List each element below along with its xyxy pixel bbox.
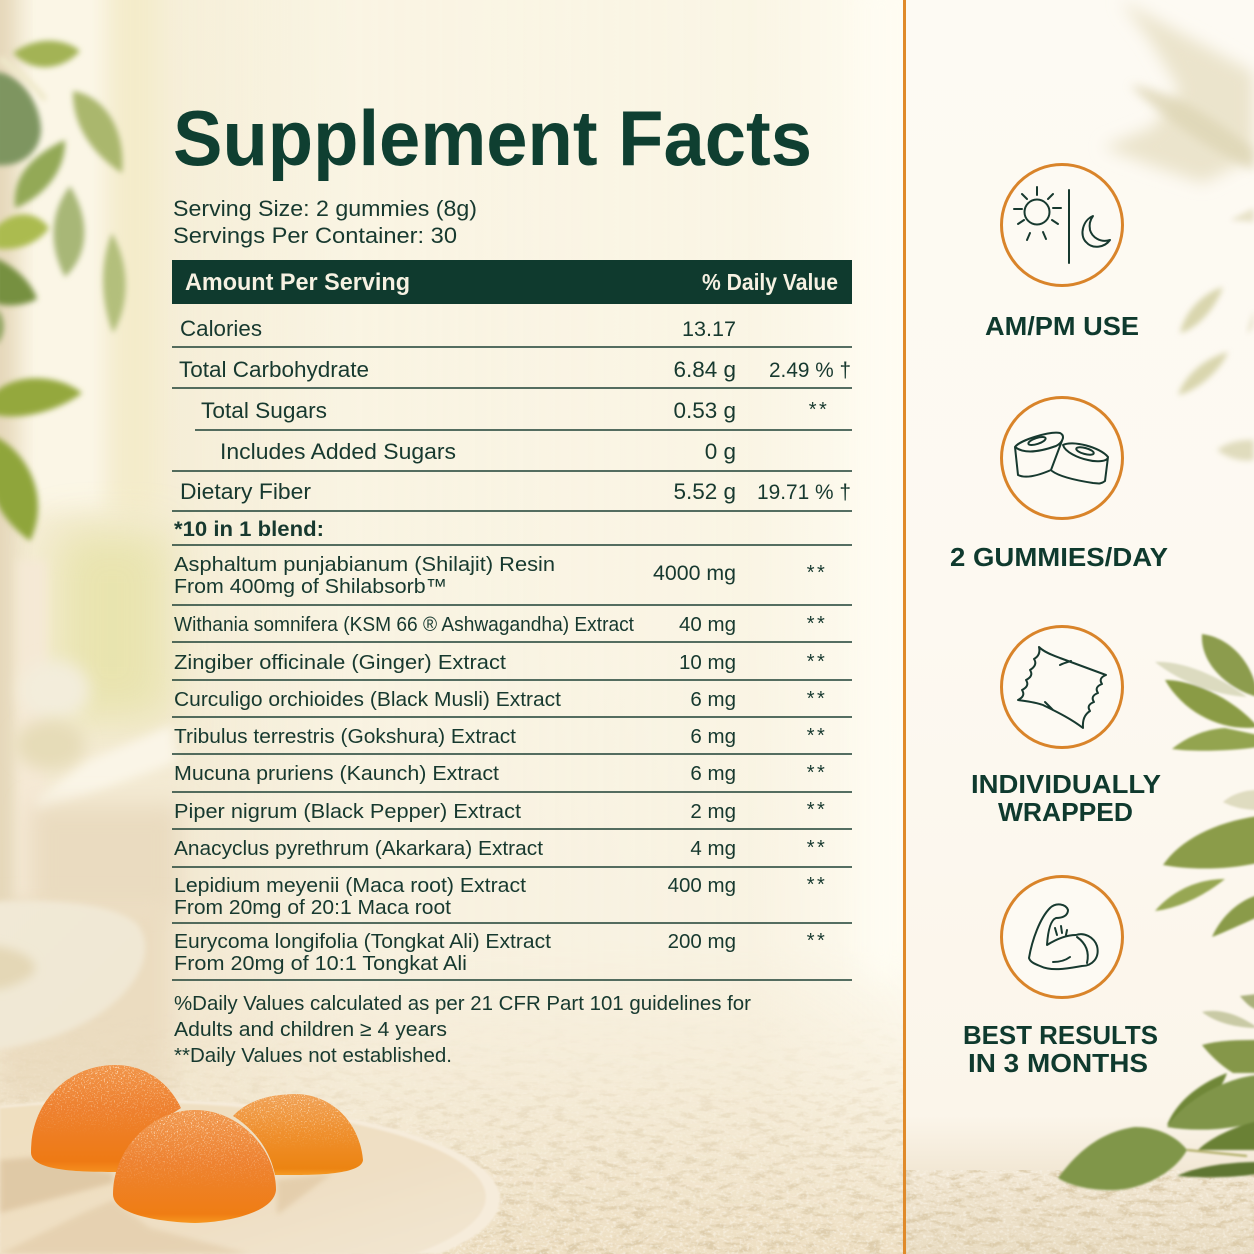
benefit: AM/PM use bbox=[985, 164, 1139, 341]
row: shilajit bbox=[172, 553, 852, 605]
row: total carbohydrate: 2.49 % † bbox=[769, 358, 851, 382]
row: akarkara bbox=[172, 837, 852, 867]
gummy centre bbox=[110, 1105, 280, 1223]
row: dietary fiber bbox=[172, 479, 852, 511]
row: dietary fiber: Dietary Fiber bbox=[180, 479, 312, 504]
benefit: best results bbox=[963, 876, 1158, 1078]
row: ashwagandha: 40 mg bbox=[679, 613, 736, 636]
label: 2 GUMMIES/DAY bbox=[950, 542, 1168, 572]
gummy candies bbox=[20, 1060, 370, 1223]
row: gokshura: Tribulus terrestris (Gokshura) Extract bbox=[174, 725, 516, 748]
row: total sugars: 0.53 g bbox=[673, 398, 736, 423]
row: black musli: 6 mg bbox=[690, 688, 736, 711]
background photo: left side bbox=[0, 0, 905, 1254]
row: total sugars: ** bbox=[809, 399, 829, 421]
row: dietary fiber: 5.52 g bbox=[673, 479, 736, 504]
row: maca: ** bbox=[807, 874, 827, 896]
gummy right bbox=[233, 1094, 363, 1175]
row: calories: Calories bbox=[180, 316, 262, 341]
label: BEST RESULTS bbox=[963, 1020, 1158, 1050]
row: maca bbox=[172, 874, 852, 923]
table header bar bbox=[172, 260, 852, 304]
row: dietary fiber: 19.71 % † bbox=[757, 480, 851, 504]
table header bar: Amount Per Serving bbox=[185, 269, 410, 296]
footnotes: %Daily Values calculated as per 21 CFR Part 101 guidelines for bbox=[174, 992, 751, 1015]
row: kaunch: 6 mg bbox=[690, 762, 736, 785]
row: total carbohydrate: 6.84 g bbox=[673, 357, 736, 382]
row: total carbohydrate: Total Carbohydrate bbox=[179, 357, 369, 382]
footnotes: Adults and children ≥ 4 years bbox=[174, 1018, 447, 1041]
serving info: Servings Per Container: 30 bbox=[173, 223, 457, 248]
row: tongkat ali: 200 mg bbox=[668, 930, 736, 953]
label bbox=[963, 1020, 1158, 1078]
row: shilajit: 4000 mg bbox=[653, 562, 736, 585]
row: shilajit: Asphaltum punjabianum (Shilajit) Resin bbox=[174, 553, 555, 576]
row: shilajit: From 400mg of Shilabsorb™ bbox=[174, 575, 447, 598]
gummy left bbox=[31, 1065, 181, 1172]
benefit: 2 gummies per day bbox=[950, 398, 1168, 572]
row: ginger bbox=[172, 651, 852, 680]
row: black pepper: 2 mg bbox=[690, 800, 736, 823]
icon: two gummies bbox=[1002, 398, 1122, 518]
row: calories bbox=[172, 316, 852, 347]
vertical orange divider bbox=[903, 0, 906, 1254]
row: ginger: ** bbox=[807, 651, 827, 673]
serving info bbox=[173, 196, 477, 248]
right foliage: faint top leaves bbox=[1103, 0, 1254, 461]
row: added sugars: 0 g bbox=[705, 439, 736, 464]
label: IN 3 MONTHS bbox=[968, 1048, 1148, 1078]
benefit: individually wrapped bbox=[971, 626, 1161, 827]
row: black pepper bbox=[172, 799, 852, 829]
row: total sugars: Total Sugars bbox=[201, 398, 327, 423]
row: black pepper: ** bbox=[807, 799, 827, 821]
row: ginger: Zingiber officinale (Ginger) Extract bbox=[174, 651, 506, 674]
row: total carbohydrate bbox=[172, 357, 852, 388]
icon: sun and moon bbox=[1002, 164, 1122, 286]
nutrition table bbox=[172, 316, 852, 980]
row: black pepper: Piper nigrum (Black Pepper) Extract bbox=[174, 800, 521, 823]
row: akarkara: Anacyclus pyrethrum (Akarkara) Extract bbox=[174, 837, 543, 860]
table header bar: % Daily Value bbox=[702, 269, 838, 295]
label: WRAPPED bbox=[998, 797, 1133, 827]
label bbox=[971, 769, 1161, 827]
footnotes bbox=[174, 992, 751, 1067]
row: tongkat ali: ** bbox=[807, 930, 827, 952]
row: shilajit: ** bbox=[807, 562, 827, 584]
row: tongkat ali: Eurycoma longifolia (Tongkat Ali) Extract bbox=[174, 930, 551, 953]
row: ginger: 10 mg bbox=[679, 651, 736, 674]
row: tongkat ali bbox=[172, 930, 852, 980]
row: maca: Lepidium meyenii (Maca root) Extract bbox=[174, 874, 526, 897]
row: akarkara: 4 mg bbox=[690, 837, 736, 860]
left foliage bbox=[0, 41, 126, 541]
row: ashwagandha bbox=[172, 613, 852, 642]
row: added sugars bbox=[172, 439, 852, 471]
row: gokshura: ** bbox=[807, 725, 827, 747]
row: akarkara: ** bbox=[807, 837, 827, 859]
row: total sugars bbox=[195, 398, 852, 430]
row: tongkat ali: From 20mg of 10:1 Tongkat Ali bbox=[174, 952, 467, 975]
row: kaunch: ** bbox=[807, 762, 827, 784]
row: black musli bbox=[172, 688, 852, 717]
title: Supplement Facts bbox=[173, 94, 812, 182]
row: kaunch bbox=[172, 762, 852, 792]
row: black musli: ** bbox=[807, 688, 827, 710]
background photo: right side bbox=[906, 0, 1254, 1254]
row: gokshura: 6 mg bbox=[690, 725, 736, 748]
row: calories: 13.17 bbox=[682, 317, 736, 341]
serving info: Serving Size: 2 gummies (8g) bbox=[173, 196, 477, 221]
right foliage: bottom leaves bbox=[1058, 634, 1254, 1190]
icon: wrapped gummy bbox=[1002, 626, 1122, 748]
icon: flexed arm bbox=[1002, 876, 1122, 998]
row: kaunch: Mucuna pruriens (Kaunch) Extract bbox=[174, 762, 499, 785]
row: maca: From 20mg of 20:1 Maca root bbox=[174, 896, 451, 919]
label: AM/PM USE bbox=[985, 311, 1139, 341]
row: added sugars: Includes Added Sugars bbox=[220, 439, 456, 464]
row: black musli: Curculigo orchioides (Black Musli) Extract bbox=[174, 688, 561, 711]
footnotes: **Daily Values not established. bbox=[174, 1044, 452, 1067]
row: maca: 400 mg bbox=[668, 874, 736, 897]
marble bowl bbox=[0, 901, 145, 1050]
row: ashwagandha: Withania somnifera (KSM 66 ® Ashwagandha) Extract bbox=[174, 613, 634, 636]
row: ashwagandha: ** bbox=[807, 613, 827, 635]
label: INDIVIDUALLY bbox=[971, 769, 1161, 799]
marble plate bbox=[0, 1099, 500, 1254]
row: gokshura bbox=[172, 725, 852, 754]
row: blend heading: *10 in 1 blend: bbox=[174, 517, 324, 541]
